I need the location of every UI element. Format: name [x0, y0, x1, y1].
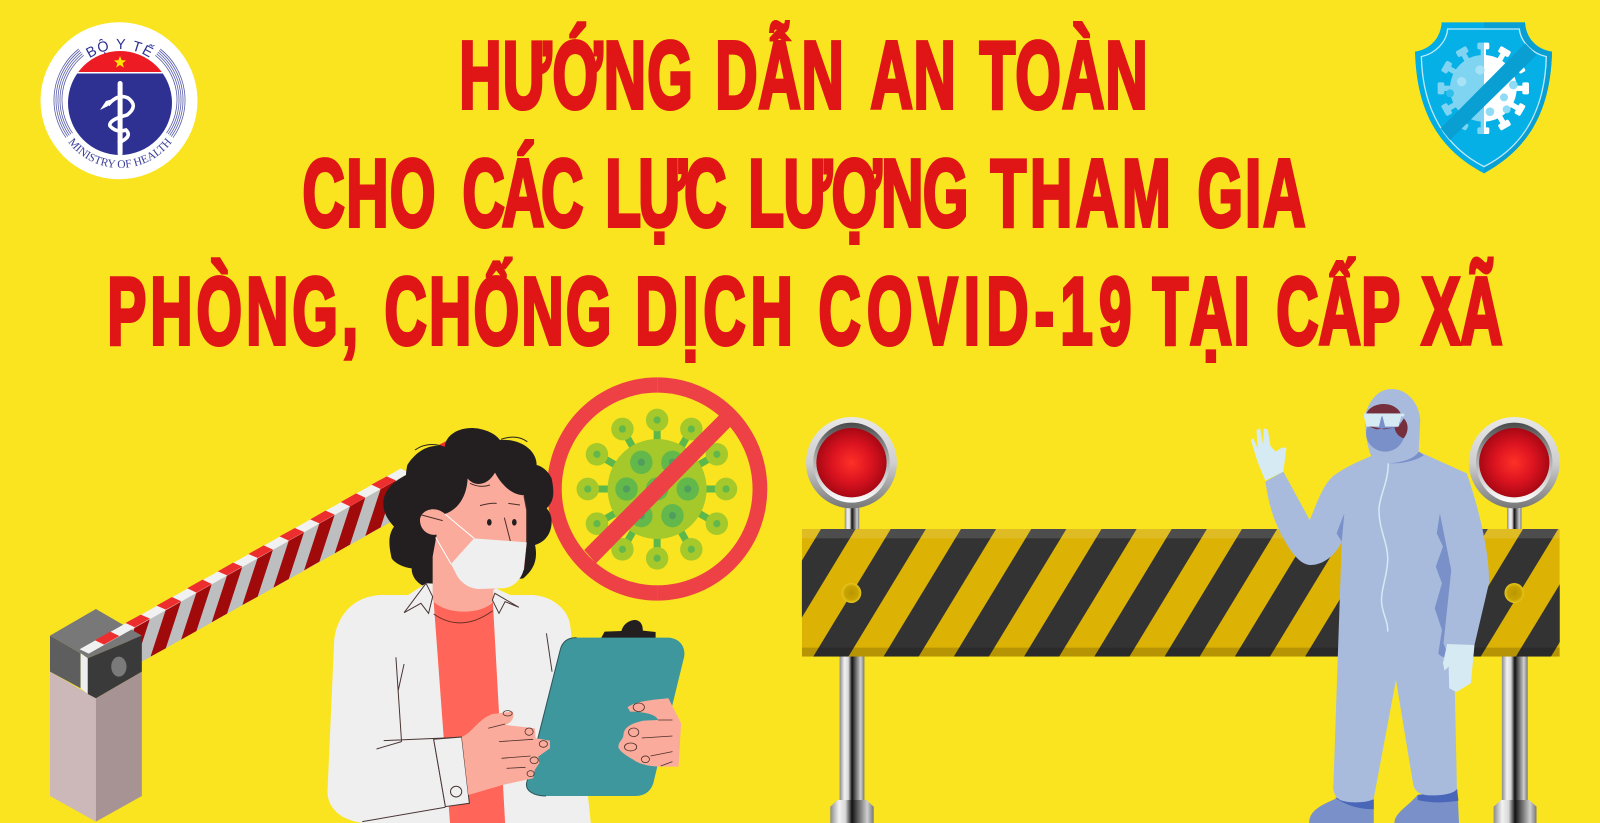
boom housing cap [50, 609, 142, 698]
lower glove [1443, 644, 1474, 692]
icon: Ministry of Health logo: BỘ Y TẾ [86, 38, 155, 58]
coat fold lines [362, 633, 552, 822]
title: TOÀN [980, 21, 1148, 129]
virus outer knobs [577, 409, 737, 570]
title: GIA [1198, 139, 1305, 247]
virus spokes [588, 420, 726, 558]
left barrier pole [830, 505, 874, 823]
face mask [451, 538, 527, 589]
protective suit [1265, 389, 1489, 802]
lab coat [327, 583, 591, 823]
icon: no virus sign [547, 377, 767, 601]
title [107, 21, 1503, 365]
boots [1309, 789, 1459, 823]
boom arm top stripes [80, 438, 452, 654]
striped barrier board [802, 529, 1560, 657]
title: CẤP [1276, 257, 1400, 365]
zipper [1379, 463, 1388, 632]
icon: Ministry of Health logo: MINISTRY OF HEALTH [68, 138, 172, 168]
title: AN [870, 21, 956, 129]
title: CHO [302, 139, 435, 247]
illustration: woman with clipboard [327, 428, 684, 823]
face [1366, 415, 1404, 452]
title: COVID-19 [818, 257, 1132, 365]
illustration: boom barrier [50, 438, 452, 822]
cuff [434, 737, 469, 807]
shirt [434, 602, 505, 823]
virus body [608, 439, 707, 539]
boom arm side face [119, 475, 406, 674]
title: TẠI [1152, 257, 1250, 365]
collar right [492, 593, 519, 613]
clipboard clip [601, 620, 656, 638]
title: THAM [990, 139, 1171, 247]
hair [383, 428, 553, 590]
collar left [404, 583, 433, 613]
hand on clipboard left [462, 712, 550, 795]
suit side shading [1337, 513, 1451, 657]
face details [422, 483, 527, 542]
right warning lamp [1469, 417, 1560, 508]
icon: antivirus shield [1415, 22, 1552, 173]
raised glove [1251, 428, 1286, 481]
title: DỊCH [635, 257, 793, 365]
person in protective suit [1251, 389, 1489, 823]
title: CHỐNG [384, 257, 611, 365]
title: LƯỢNG [748, 139, 968, 247]
hair [1365, 404, 1408, 438]
illustration: road barrier [802, 389, 1560, 823]
boom post [50, 672, 142, 822]
title: PHÒNG, [107, 257, 358, 365]
hand on clipboard right [618, 698, 681, 767]
icon: Ministry of Health logo [40, 22, 198, 180]
title: HƯỚNG [459, 21, 693, 129]
goggles [1364, 414, 1404, 427]
left warning lamp [806, 417, 897, 508]
clipboard [526, 638, 684, 796]
right barrier pole [1494, 505, 1536, 823]
title: DẪN [715, 21, 844, 129]
neck and face [420, 473, 527, 612]
title: XÃ [1422, 257, 1503, 365]
title: LỰC [605, 139, 726, 247]
title: CÁC [462, 139, 583, 247]
